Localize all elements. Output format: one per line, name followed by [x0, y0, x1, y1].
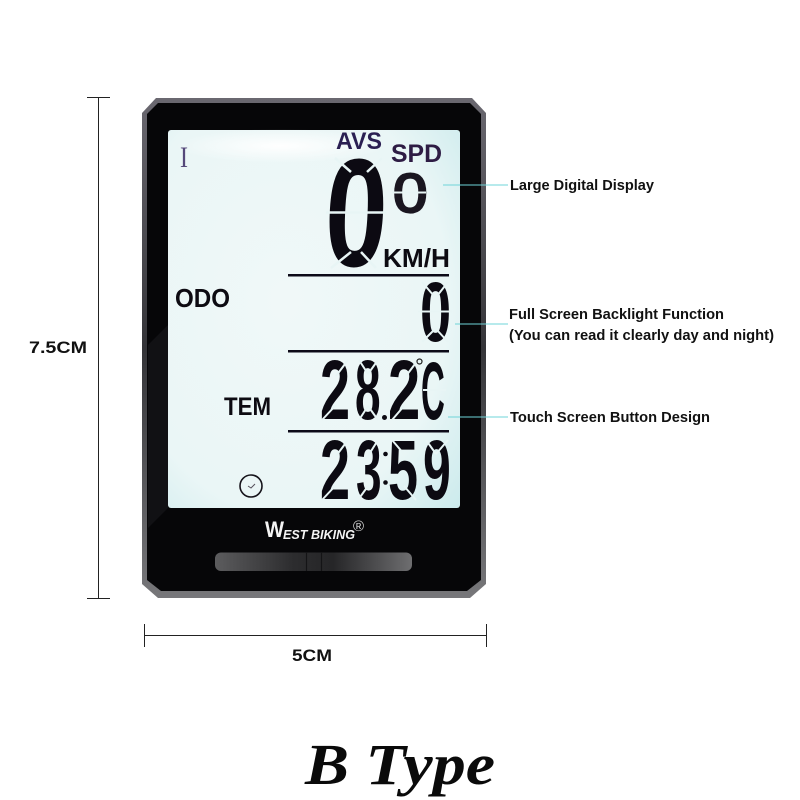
- TEM label: TEM: [224, 393, 271, 421]
- LCD screen: [168, 127, 460, 518]
- time reading: 5: [388, 423, 418, 517]
- clock icon: [240, 475, 262, 497]
- device: cycling computer: [142, 98, 486, 598]
- SPD label: SPD: [391, 140, 442, 168]
- brand logo: EST BIKING: [283, 528, 355, 542]
- callout line: backlight: [455, 324, 508, 325]
- height dimension line: [87, 97, 110, 598]
- device casing: [142, 98, 486, 598]
- callout: touch button: Touch Screen Button Design: [510, 410, 710, 426]
- callout line: large digital display: [443, 184, 508, 186]
- width dimension line: [144, 624, 486, 647]
- indicator mark: I: [180, 140, 188, 174]
- KM/H unit: KM/H: [383, 243, 450, 273]
- brand logo: W: [265, 517, 284, 542]
- time reading: 9: [423, 422, 451, 517]
- callout line: touch button: [448, 416, 508, 418]
- temperature reading: 2: [320, 343, 350, 437]
- touch button bar: [215, 552, 412, 571]
- time reading: 2: [320, 423, 350, 517]
- ODO label: ODO: [175, 283, 230, 313]
- AVS label: AVS: [336, 128, 382, 155]
- callout: backlight: Full Screen Backlight Function: [509, 307, 724, 323]
- callout: backlight: [509, 307, 774, 344]
- time reading: 3: [356, 425, 382, 518]
- brand logo: ®: [353, 518, 364, 535]
- model title: B Type: [304, 732, 495, 797]
- main speed reading: 0: [322, 127, 391, 299]
- secondary speed reading: 0: [393, 163, 427, 224]
- callout: backlight: (You can read it clearly day and night): [509, 328, 774, 344]
- odometer reading: 0: [420, 266, 451, 360]
- divider 1: [288, 274, 449, 276]
- callout: large digital display: Large Digital Display: [510, 178, 654, 194]
- device front bezel: [147, 103, 481, 591]
- temperature reading: 8: [355, 345, 381, 438]
- divider 2: [288, 350, 449, 352]
- temperature reading: 2: [388, 345, 420, 438]
- time reading: [320, 422, 451, 518]
- temperature reading: [320, 343, 446, 438]
- temperature reading: C: [421, 346, 445, 437]
- height label: 7.5CM: [29, 339, 87, 357]
- brand logo: [265, 517, 364, 542]
- divider 3: [288, 430, 449, 432]
- width label: 5CM: [292, 647, 332, 665]
